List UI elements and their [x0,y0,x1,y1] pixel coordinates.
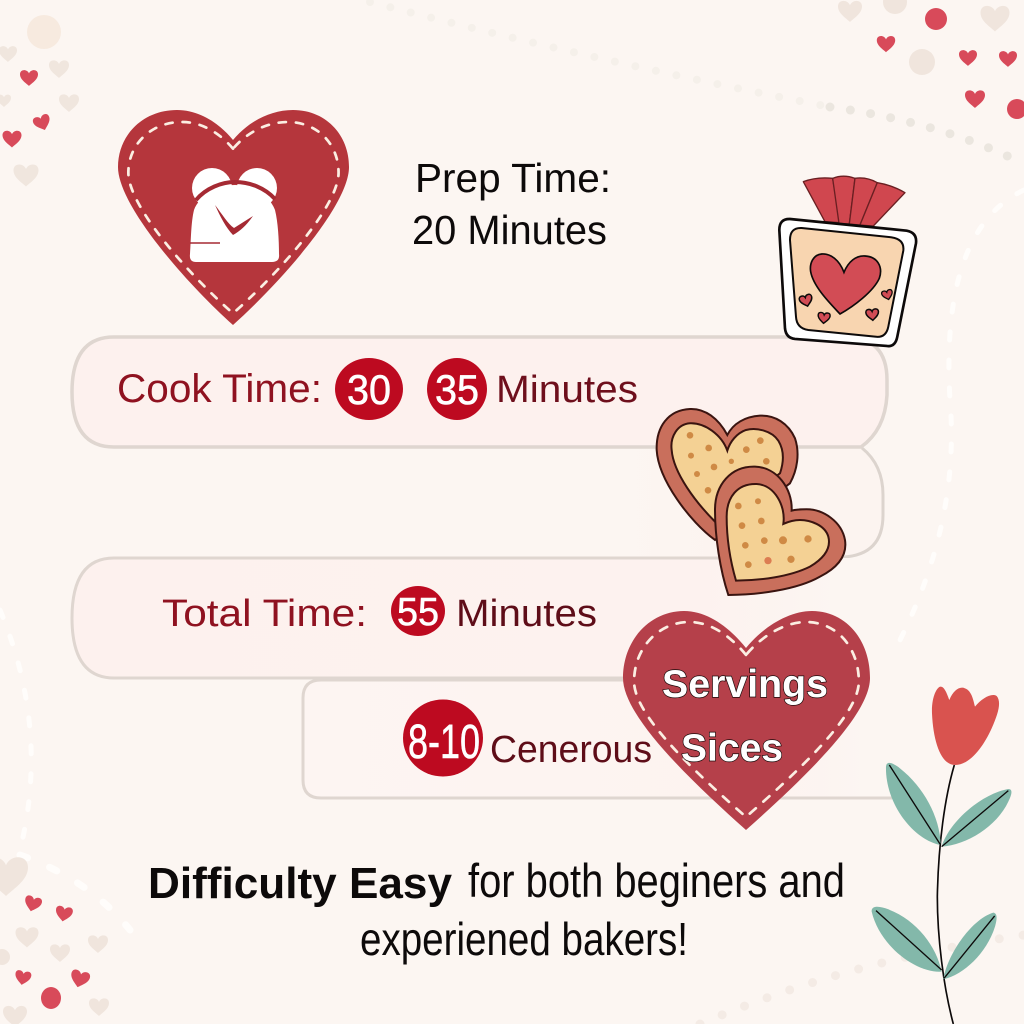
text: prep time [412,155,611,253]
icon: heart with alarm clock [118,110,349,325]
text: servings row: 8-10 [408,716,480,769]
panel: cook time [72,337,887,447]
text: servings row: Cenerous [490,729,652,771]
text: cook time row: Cook Time: [117,367,322,411]
panel: servings [303,680,892,798]
text: difficulty note: experiened bakers! [360,913,688,965]
decoration: bottom left hearts [0,857,109,1024]
text: servings heart label [662,663,828,770]
front cookie [715,467,845,595]
text: cook time row [117,358,638,420]
text: servings heart label: Servings [662,663,828,706]
text: cook time row: Minutes [496,369,638,411]
icon: heart cookies [657,409,845,595]
back cookie [657,409,798,540]
decoration: top right hearts [838,0,1024,119]
text: servings heart label: Sices [681,727,783,770]
text: total time row: Total Time: [162,593,367,635]
text: total time row [162,586,597,636]
icon: gift bag with heart [779,176,916,346]
text: total time row: Minutes [456,593,597,635]
panel: total time [72,558,850,678]
panel: empty ribbon [600,447,883,557]
icon: tulip flower [872,687,1011,1024]
icon: servings heart [623,611,870,830]
text: prep time: 20 Minutes [412,207,607,253]
text: difficulty note [148,854,845,965]
text: cook time row: 30 [347,366,391,413]
text: difficulty note: Difficulty Easy [148,859,453,908]
text: difficulty note: for both beginers and [468,854,845,907]
text: prep time: Prep Time: [415,155,611,201]
text: servings row [403,700,652,776]
text: total time row: 55 [397,591,439,634]
text: cook time row: 35 [435,366,479,413]
decoration: top left hearts [0,15,79,186]
